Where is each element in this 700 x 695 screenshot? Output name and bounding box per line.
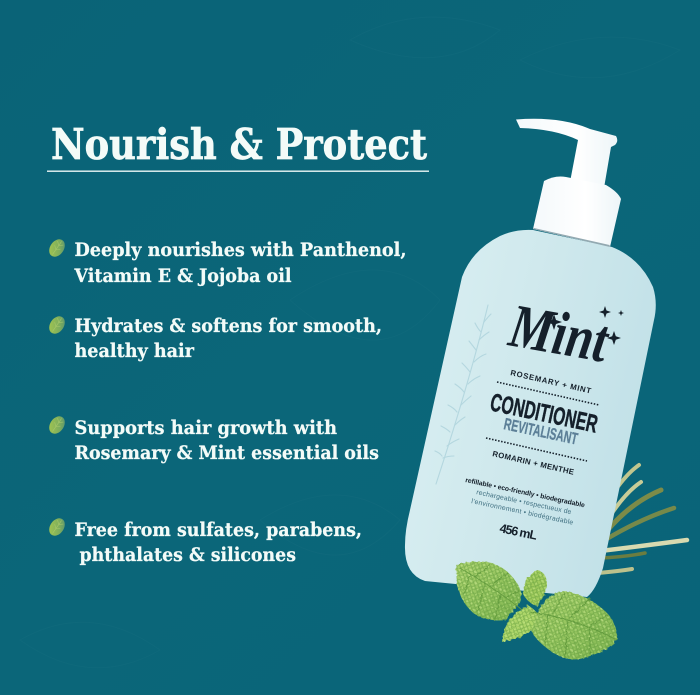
icon: mint leaf bullet <box>46 313 68 337</box>
sparkles <box>546 306 624 345</box>
bullet: hydrates <box>46 313 382 362</box>
neck shadow <box>533 228 610 247</box>
text: hydrates: Hydrates & softens for smooth, <box>74 315 382 337</box>
brand name Mint: Mint <box>504 292 614 376</box>
mint leaves <box>456 561 617 659</box>
label: romarin + menthe: ROMARIN + MENTHE <box>492 449 575 477</box>
icon: mint leaf bullet <box>46 236 68 260</box>
pump nozzle <box>516 119 617 188</box>
text: nourishes: Vitamin E & Jojoba oil <box>74 265 292 287</box>
dotted divider <box>497 382 599 405</box>
icon: mint leaf bullet <box>46 515 68 539</box>
pump collar <box>533 176 621 247</box>
title: Nourish & Protect <box>51 120 428 169</box>
text: growth: Supports hair growth with <box>74 417 337 439</box>
label: revitalisant: REVITALISANT <box>502 415 579 449</box>
bottle body <box>405 230 656 597</box>
text: growth: Rosemary & Mint essential oils <box>74 442 379 464</box>
text: hydrates: healthy hair <box>74 340 195 362</box>
label: eco claims: l'environnement • biodégradable <box>471 498 574 527</box>
label: volume: 456 mL <box>498 521 539 543</box>
bullet list <box>46 236 407 566</box>
label: eco claims <box>465 477 586 527</box>
label: eco claims: rechargeable • respectueux de <box>476 489 572 516</box>
label: conditioner: CONDITIONER <box>488 388 600 439</box>
text: free from: Free from sulfates, parabens, <box>74 519 362 541</box>
title underline <box>47 170 429 172</box>
text: nourishes: Deeply nourishes with Panthenol, <box>74 239 406 261</box>
bullet: growth <box>46 413 379 464</box>
bullet: nourishes <box>46 236 407 287</box>
mint leaf: lower small <box>502 605 540 642</box>
text: free from: phthalates & silicones <box>80 544 296 566</box>
sprig illustration <box>435 305 491 484</box>
pump dispenser <box>516 119 621 247</box>
bottle <box>405 228 656 597</box>
rosemary sprig behind bottle <box>598 465 687 573</box>
bullet: free from <box>46 515 362 566</box>
icon: mint leaf bullet <box>46 413 68 437</box>
mint leaf: left <box>456 561 525 620</box>
dotted divider <box>486 438 587 461</box>
mint leaf: top small <box>523 570 547 606</box>
label: rosemary + mint: ROSEMARY + MINT <box>510 368 592 396</box>
label: eco claims: refillable • eco-friendly • biodegradable <box>465 477 586 509</box>
mint leaf: right large <box>530 591 617 659</box>
